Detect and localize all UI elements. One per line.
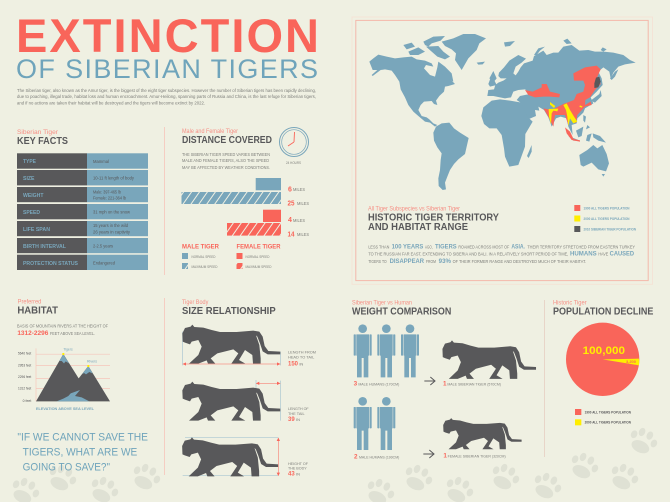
map description: FROM [426, 259, 436, 264]
heading: distance covered [182, 129, 272, 146]
heading: weight comparison [352, 301, 451, 317]
British Isles and Iceland [488, 71, 497, 87]
facts table: Endangered [93, 260, 116, 266]
tiger: tail length: 39 [288, 416, 295, 423]
heading: habitat [17, 299, 58, 317]
legend: male and female speed: FEMALE TIGER [236, 244, 281, 250]
habitat description: FEET ABOVE SEA LEVEL. [50, 331, 95, 336]
panel: key facts [17, 129, 148, 270]
heading: distance covered: DISTANCE COVERED [182, 135, 272, 146]
map legend: 2000 ALL TIGERS POPULATION [584, 217, 630, 221]
heading: population decline: Historic Tiger [553, 301, 587, 307]
tiger range: 2000 population [549, 102, 583, 126]
intro paragraph: due to poaching, illegal trade, habitat loss and human encroachment. Amur-Heilong, spanning parts of Russia and China, is the last refuge for Siberian tigers, [17, 94, 316, 99]
heading: habitat: HABITAT [17, 306, 58, 317]
map heading [368, 206, 499, 233]
tiger: head to tail length: 150 [288, 360, 298, 367]
row text: female tiger [443, 453, 506, 460]
quote: GOING TO SAVE?" [23, 462, 110, 474]
panel: historic tiger territory map [352, 17, 652, 284]
heading: size relationship: SIZE RELATIONSHIP [182, 306, 276, 317]
description text [182, 152, 270, 170]
mountain elevation chart: 0 feet [23, 399, 31, 403]
row text: female tiger: FEMALE SIBERIAN TIGER (320CM) [448, 454, 506, 459]
tiger: body height: HEIGHT OF [288, 461, 309, 466]
tiger: head to tail length: IN [299, 361, 303, 366]
facts table [17, 153, 148, 270]
map description: CAUSED [610, 251, 634, 258]
Africa [481, 99, 533, 167]
description text: MAY BE AFFECTED BY WEATHER CONDITIONS. [182, 165, 270, 170]
facts table: Male: 397-465 lb [93, 190, 122, 194]
map legend: 2010 SIBERIAN TIGER POPULATION [584, 228, 636, 232]
heading: habitat: Preferred [18, 299, 41, 305]
tiger: body height: 43 [288, 471, 295, 478]
map legend [574, 205, 636, 232]
bar chart: miles per day: MILES [297, 201, 309, 206]
facts table: 2-2.5 years [93, 244, 113, 248]
quote: "IF WE CANNOT SAVE THE [17, 432, 148, 444]
map heading: All Tiger Subspecies vs Siberian Tiger [368, 206, 460, 212]
South America [433, 123, 469, 190]
panel: weight comparison [352, 301, 536, 460]
tiger: tail length: IN [296, 417, 300, 422]
map legend: 1900 ALL TIGERS POPULATION [584, 206, 630, 210]
heading: key facts [17, 129, 68, 147]
map description: 100 YEARS [392, 244, 423, 251]
tiger: body height: IN [296, 472, 300, 477]
description text: THE SIBERIAN TIGER SPEED VARIES BETWEEN [182, 152, 270, 157]
quote: TIGERS, WHAT ARE WE [23, 447, 137, 459]
map description: OF THEIR FORMER RANGE AND DESTROYED MUCH OF THEIR HABITAT. [453, 259, 586, 264]
bar chart: miles per day: MILES [293, 218, 305, 223]
mountain elevation chart: 2953 feet [18, 363, 31, 367]
heading: distance covered: Male and Female Tiger [182, 129, 238, 135]
heading: size relationship [182, 300, 276, 317]
Australia [579, 145, 609, 177]
legend: male and female speed: NORMAL SPEED [246, 255, 270, 259]
title: Extinction: EXTINCTION [16, 9, 319, 62]
mountain elevation chart: 2296 feet [18, 375, 31, 379]
pie chart: 100,000 [583, 345, 625, 357]
facts table: BIRTH INTERVAL [23, 244, 67, 250]
map description: DISAPPEAR [390, 258, 424, 265]
heading: weight comparison: Siberian Tiger vs Human [352, 301, 412, 307]
legend: male and female speed [182, 244, 281, 269]
pie chart: 3,200 [626, 360, 636, 364]
subtitle: of Siberian tigers: OF SIBERIAN TIGERS [16, 54, 318, 84]
facts table: Mammal [93, 159, 109, 164]
facts table: Female: 221-364 lb [93, 196, 127, 200]
legend: male and female speed: MAXIMUM SPEED [192, 265, 218, 269]
facts table: LIFE SPAN [23, 227, 50, 233]
facts table: TYPE [23, 159, 36, 165]
Japan and Sakhalin [591, 47, 618, 103]
heading: weight comparison: WEIGHT COMPARISON [352, 306, 451, 317]
row text: three humans [354, 381, 400, 388]
map description: ASIA. [511, 244, 525, 251]
map description: THEIR TERRITORY STRETCHED FROM EASTERN TURKEY [527, 245, 635, 250]
tiger: head to tail length [182, 325, 316, 367]
mountain elevation chart: Rivers [87, 360, 97, 364]
map description [368, 244, 635, 265]
map description: HUMANS [570, 251, 597, 258]
row text: three humans: 3 [354, 381, 358, 388]
world map [369, 34, 636, 190]
facts table: 31 mph on the snow [93, 210, 131, 214]
icons: two male humans [354, 397, 395, 450]
tiger: head to tail length: HEAD TO TAIL [288, 355, 315, 360]
heading: size relationship: Tiger Body [182, 300, 208, 306]
bar chart: miles per day: 6 [288, 186, 292, 194]
panel: distance covered [182, 128, 309, 269]
bar chart: miles per day: 25 [288, 200, 295, 208]
arrow [423, 450, 434, 458]
habitat description: 1312-2296 [17, 330, 49, 337]
heading: key facts: Siberian Tiger [17, 129, 59, 136]
arrow [424, 377, 435, 385]
row text: female tiger: 1 [443, 453, 447, 460]
tiger: male [442, 340, 536, 379]
row text: two humans: MALE HUMANS (190CM) [359, 454, 400, 459]
Greenland [442, 34, 486, 70]
tiger: female [443, 418, 522, 449]
panel: population decline [553, 301, 654, 425]
facts table: 26 years in captivity [93, 230, 131, 234]
Europe and Asia [487, 45, 636, 135]
tiger: tail length [182, 380, 309, 423]
facts table: WEIGHT [23, 193, 44, 199]
Madagascar [527, 145, 532, 158]
facts table: SIZE [23, 176, 35, 182]
heading: population decline: POPULATION DECLINE [553, 306, 654, 317]
heading: key facts: KEY FACTS [17, 136, 68, 147]
mountain elevation chart: ELEVATION ABOVE SEA LEVEL [36, 406, 95, 411]
panel: habitat [17, 299, 148, 474]
intro paragraph: The Siberian tiger, also known as the Amur tiger, is the biggest of the eight tiger subspecies. However the number of Siberian tigers has been rapidly declining, [17, 88, 316, 93]
bar chart: miles per day: 4 [288, 217, 292, 224]
row text: male tiger [443, 381, 502, 388]
icon: clock 24 hours: 24 HOURS [286, 161, 301, 165]
legend: male and female speed: MAXIMUM SPEED [246, 265, 272, 269]
mountain elevation chart: 5640 feet [18, 351, 31, 355]
legend: male and female speed: NORMAL SPEED [192, 255, 216, 259]
tiger: head to tail length: LENGTH FROM [288, 349, 316, 354]
heading: population decline [553, 301, 654, 317]
row text: three humans: MALE HUMANS (170CM) [358, 382, 400, 387]
tiger: tail length: THE TAIL [288, 411, 305, 416]
mountain elevation chart: Tigers [63, 348, 73, 352]
facts table: PROTECTION STATUS [23, 261, 78, 267]
quote [17, 432, 148, 474]
icons: three male humans [354, 324, 419, 377]
facts table: 15 years in the wild [93, 223, 129, 228]
tiger range: Siberian tiger population [594, 77, 601, 88]
Arctic islands [403, 36, 572, 82]
North and Central America [369, 55, 455, 127]
map description: TO THE RUSSIAN FAR EAST, EXTENDING TO SIBERIA AND BALI. IN A RELATIVELY SHORT PERIOD OF TIME, [368, 252, 568, 257]
map heading: HISTORIC TIGER TERRITORY [368, 212, 499, 224]
facts table: SPEED [23, 210, 40, 216]
row text: two humans: 2 [354, 453, 358, 460]
bar chart: miles per day: 14 [288, 232, 295, 238]
mountain elevation chart [18, 348, 110, 411]
pie legend: 2000 ALL TIGERS POPULATION [585, 421, 631, 425]
bar chart: miles per day: MILES [297, 232, 309, 237]
bar chart: miles per day: MILES [293, 187, 305, 192]
row text: male tiger: MALE SIBERIAN TIGER (570CM) [447, 382, 502, 387]
row text: two humans [354, 453, 400, 460]
mountain elevation chart: 1312 feet [18, 387, 31, 391]
tiger: body height [182, 437, 309, 478]
habitat description: BASIS OF MOUNTAIN RIVERS AT THE HEIGHT OF [17, 324, 108, 329]
pie chart [566, 323, 639, 396]
legend: male and female speed: MALE TIGER [182, 244, 219, 250]
row text: male tiger: 1 [443, 381, 447, 388]
map description: TIGERS TO [368, 259, 387, 264]
description text: MALE AND FEMALE TIGERS, ALSO THE SPEED [182, 158, 270, 163]
intro paragraph: and if no actions are taken their habitat will be destroyed and the tigers will become extinct by 2022. [17, 100, 205, 106]
tiger: body height: THE BODY [288, 466, 307, 471]
panel: size relationship [182, 300, 316, 478]
map description: LESS THAN [368, 245, 389, 250]
icon: clock 24 hours [280, 128, 308, 165]
map heading: AND HABITAT RANGE [368, 222, 468, 233]
map description: HAVE [598, 252, 608, 257]
facts table: 10-11 ft length of body [93, 176, 135, 180]
tiger range: 1900 population [525, 66, 601, 142]
map description: ROAMED ACROSS MOST OF [458, 245, 510, 250]
Southeast Asia and Oceania islands [568, 115, 606, 143]
map description: TIGERS [435, 244, 457, 251]
map description: 93% [439, 258, 451, 265]
tiger: tail length: LENGTH OF [288, 406, 309, 411]
intro paragraph [17, 88, 316, 106]
map description: AGO, [425, 245, 433, 250]
title block [16, 9, 319, 106]
bar chart: miles per day [182, 178, 309, 238]
pie legend [575, 409, 631, 425]
habitat description [17, 324, 108, 337]
pie legend: 1900 ALL TIGERS POPULATION [585, 411, 631, 415]
background paw prints [7, 424, 661, 502]
